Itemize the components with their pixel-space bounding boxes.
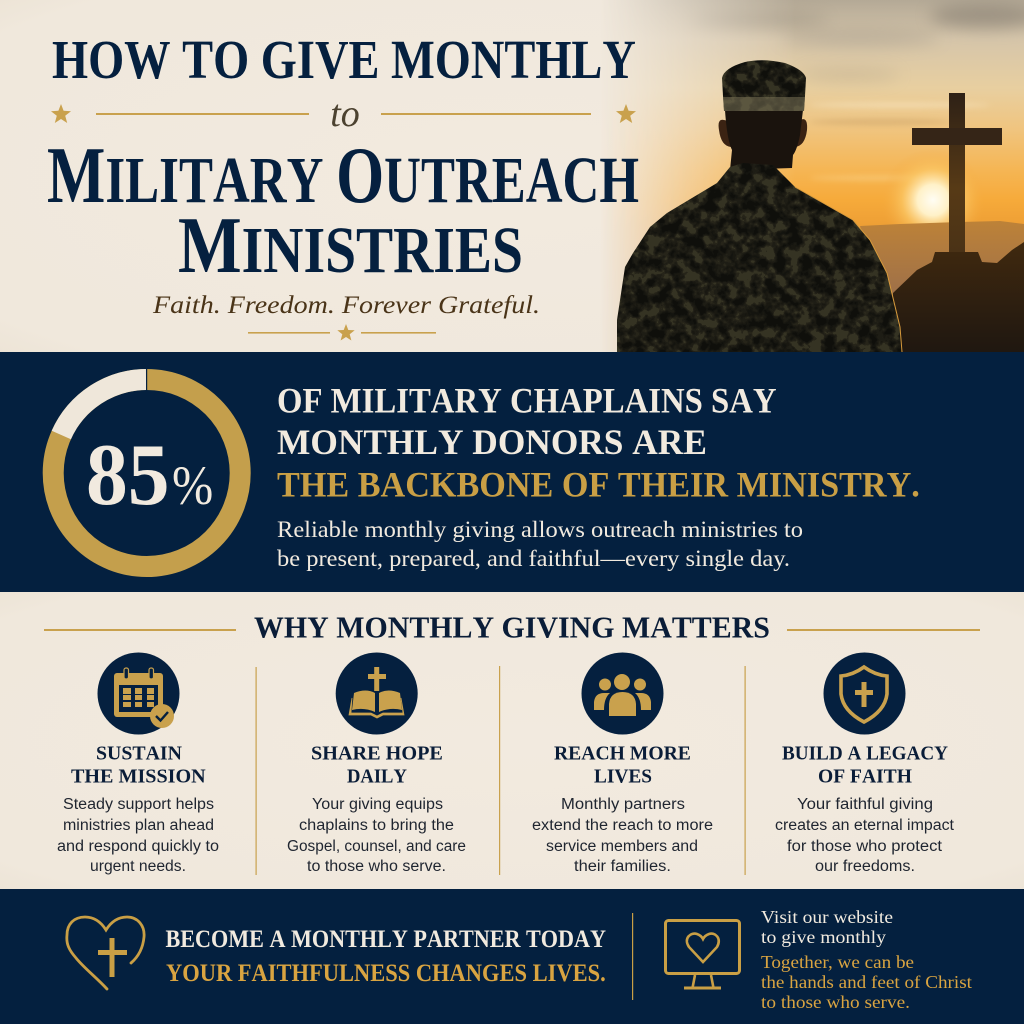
text: build a legacy of faith: our freedoms.	[815, 858, 915, 875]
hill with cross	[890, 93, 1024, 352]
supporting text	[277, 517, 803, 571]
headline: OF MILITARY CHAPLAINS SAY	[277, 381, 777, 421]
text: share hope daily: Your giving equips	[312, 796, 443, 813]
text: reach more lives: their families.	[574, 858, 671, 875]
text: share hope daily: chaplains to bring the	[299, 817, 454, 834]
sun glow	[881, 148, 985, 252]
call to action text	[166, 926, 606, 987]
column: build a legacy of faith	[775, 652, 955, 875]
heading: sustain the mission: SUSTAIN	[96, 742, 182, 765]
call to action text: YOUR FAITHFULNESS CHANGES LIVES.	[166, 960, 606, 987]
heading: build a legacy of faith: OF FAITH	[818, 765, 912, 788]
heading: build a legacy of faith: BUILD A LEGACY	[782, 742, 948, 765]
text: build a legacy of faith: Your faithful giving	[797, 796, 933, 813]
text: sustain the mission: Steady support helps	[63, 796, 214, 813]
website text: the hands and feet of Christ	[761, 972, 972, 992]
call to action text: BECOME A MONTHLY PARTNER TODAY	[166, 926, 606, 953]
heading: reach more lives	[554, 742, 691, 788]
panel: statistic band	[0, 352, 1024, 592]
headline: THE BACKBONE OF THEIR MINISTRY.	[277, 465, 920, 505]
text: sustain the mission: and respond quickly to	[57, 838, 219, 855]
icon: heart with cross	[67, 917, 144, 989]
website text: Together, we can be	[761, 952, 914, 972]
text: reach more lives: Monthly partners	[561, 796, 685, 813]
panel: call to action footer	[0, 889, 1024, 1024]
paper background	[0, 0, 1024, 352]
text: share hope daily	[287, 796, 466, 875]
supporting text: be present, prepared, and faithful—every single day.	[277, 546, 790, 571]
column: sustain the mission	[57, 652, 219, 875]
icon: open book with cross	[336, 652, 418, 734]
heading: sustain the mission	[71, 742, 206, 788]
text: sustain the mission	[57, 796, 219, 875]
icon: shield with cross	[824, 652, 906, 734]
text: reach more lives: service members and	[546, 838, 698, 855]
text: build a legacy of faith: creates an eternal impact	[775, 817, 955, 834]
heading: reach more lives: REACH MORE	[554, 742, 691, 765]
ornament: to divider: to	[330, 93, 360, 135]
donut chart 85%: %	[172, 456, 213, 517]
text: build a legacy of faith	[775, 796, 955, 875]
website text: Visit our website	[761, 907, 893, 927]
text: sustain the mission: urgent needs.	[90, 858, 186, 875]
donut chart 85%	[53, 368, 240, 566]
headline	[277, 381, 920, 505]
icon: calendar	[98, 652, 180, 734]
title line 1: HOW TO GIVE MONTHLY	[52, 30, 636, 91]
ornament: star divider	[248, 324, 436, 340]
website text	[761, 907, 972, 1012]
heading: reach more lives: LIVES	[594, 765, 652, 788]
heading: build a legacy of faith	[782, 742, 948, 788]
text: sustain the mission: ministries plan ahead	[63, 817, 214, 834]
sunset sky photo	[600, 0, 1024, 352]
website text: to those who serve.	[761, 992, 910, 1012]
text: reach more lives	[532, 796, 713, 875]
supporting text: Reliable monthly giving allows outreach ministries to	[277, 517, 803, 542]
panel: hero header	[0, 0, 1024, 355]
title line 2: MILITARY OUTREACH	[47, 131, 639, 220]
distant mountains	[860, 221, 1024, 300]
soldier silhouette	[610, 55, 910, 355]
tagline: Faith. Freedom. Forever Grateful.	[152, 292, 540, 319]
heading: share hope daily: SHARE HOPE	[311, 742, 443, 765]
section heading: WHY MONTHLY GIVING MATTERS	[254, 610, 770, 645]
text: build a legacy of faith: for those who protect	[787, 838, 943, 855]
icon: monitor with heart	[666, 920, 740, 990]
donut chart 85%: 85	[86, 426, 170, 523]
column: share hope daily	[287, 652, 466, 875]
heading: sustain the mission: THE MISSION	[71, 765, 206, 788]
ornament: to divider	[51, 93, 636, 135]
icon: group of people	[582, 652, 664, 734]
text: share hope daily: Gospel, counsel, and care	[287, 838, 466, 855]
text: reach more lives: extend the reach to more	[532, 817, 713, 834]
heading: share hope daily	[311, 742, 443, 788]
column: reach more lives	[532, 652, 713, 875]
panel: why monthly giving matters	[0, 592, 1024, 889]
headline: MONTHLY DONORS ARE	[277, 422, 707, 462]
website text: to give monthly	[761, 927, 886, 947]
text: share hope daily: to those who serve.	[307, 858, 446, 875]
title line 3: MINISTRIES	[178, 202, 523, 290]
heading: share hope daily: DAILY	[347, 766, 407, 788]
